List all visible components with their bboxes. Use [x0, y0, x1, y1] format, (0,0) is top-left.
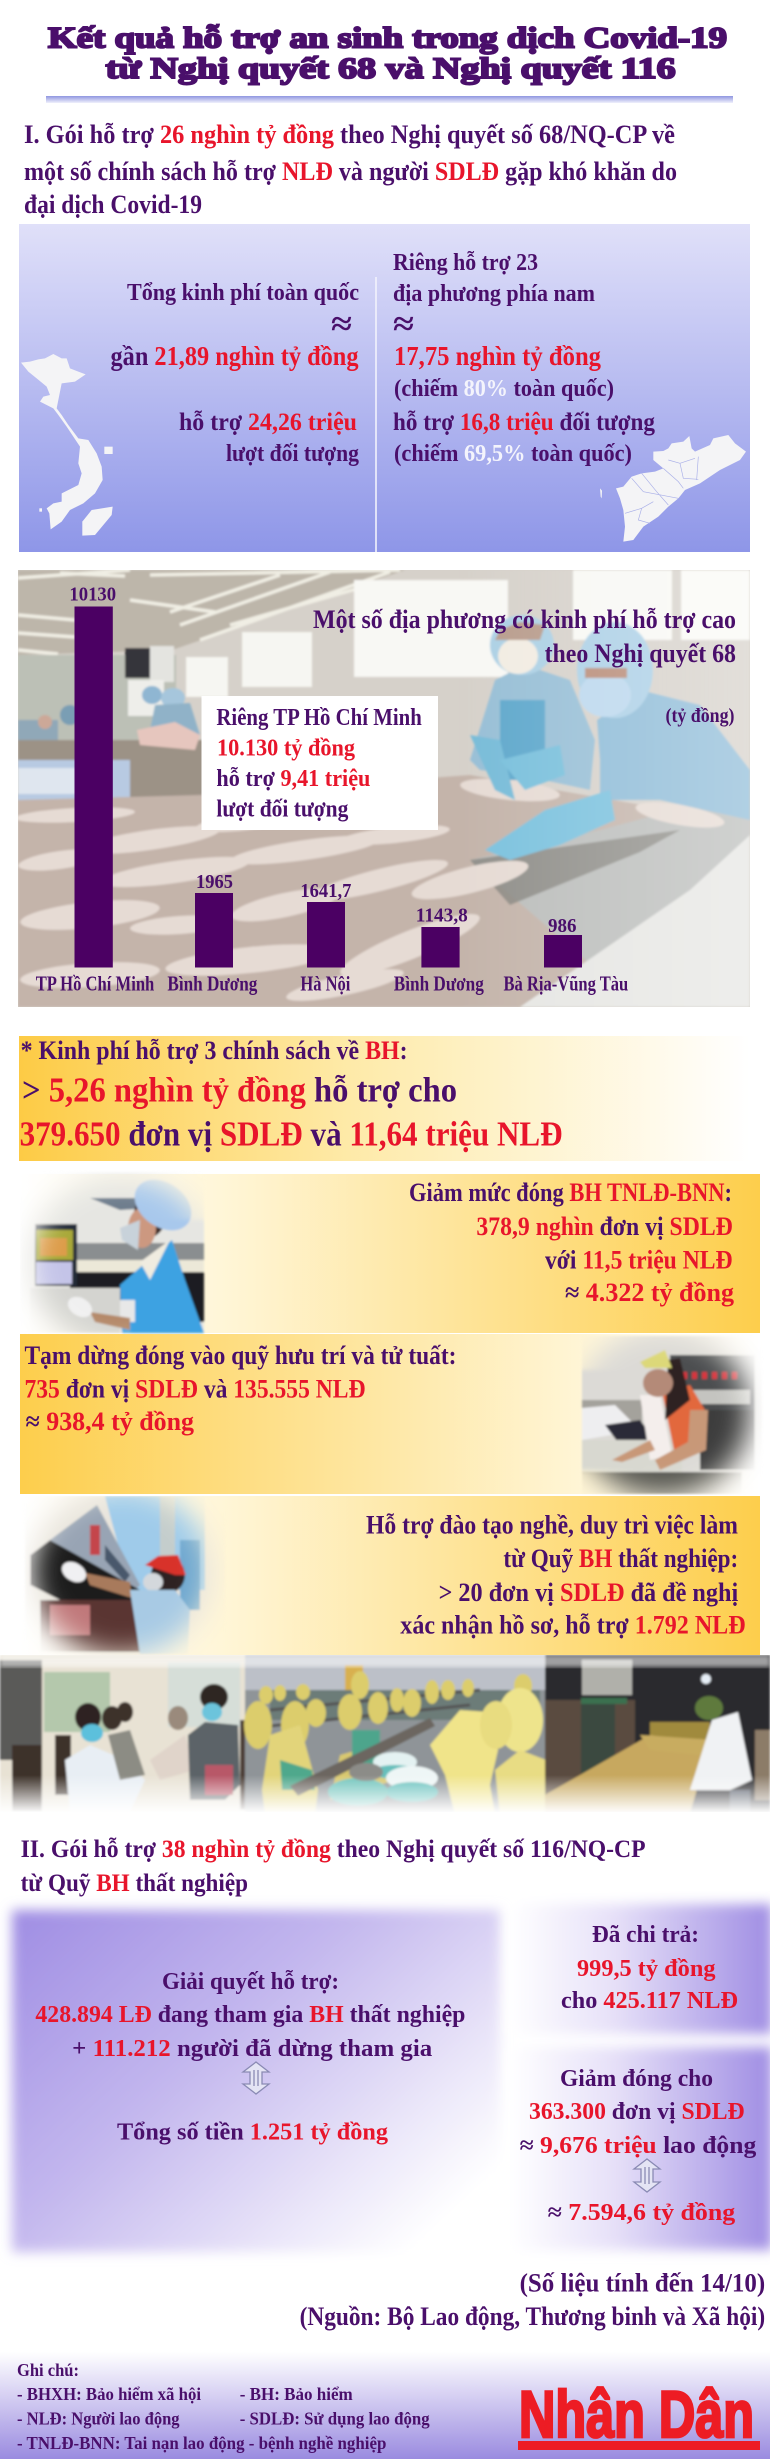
photo: fish processing workers [15, 570, 750, 1007]
panel: insurance policy funding summary: > 5,26 nghìn tỷ đồng hỗ trợ cho [22, 1070, 457, 1110]
title [48, 22, 727, 85]
fade edges [0, 1775, 770, 1813]
panel: insurance policy funding summary: * Kinh phí hỗ trợ 3 chính sách về BH: [21, 1036, 408, 1065]
bar: Bình Dương second: 1143,8 [416, 905, 468, 927]
right column: 23 southern localities: địa phương phía nam [393, 281, 595, 307]
left column: national total: hỗ trợ 24,26 triệu [179, 409, 357, 436]
callout: Ho Chi Minh City: hỗ trợ 9,41 triệu [216, 766, 370, 792]
panel: already paid [510, 1904, 770, 2034]
photo: garment worker [582, 1336, 762, 1494]
chart heading [313, 605, 736, 727]
source note: (Số liệu tính đến 14/10) [520, 2268, 765, 2298]
heading: section I: I. Gói hỗ trợ 26 nghìn tỷ đồng theo Nghị quyết số 68/NQ-CP về [24, 120, 675, 149]
callout: Ho Chi Minh City [202, 696, 438, 830]
panel: reduced contributions II [510, 2047, 770, 2250]
icon: map of Vietnam [21, 354, 113, 536]
worker right [597, 690, 750, 820]
right column: 23 southern localities: (chiếm 69,5% toàn quốc) [394, 441, 632, 467]
heading: section II: từ Quỹ BH thất nghiệp [21, 1870, 248, 1897]
left column: national total [110, 280, 359, 467]
heading: section I: đại dịch Covid-19 [24, 190, 202, 219]
legend notes: - NLĐ: Người lao động [17, 2409, 180, 2429]
callout: Ho Chi Minh City: lượt đối tượng [216, 797, 348, 823]
title underline [46, 96, 733, 103]
heading: section I: một số chính sách hỗ trợ NLĐ và người SDLĐ gặp khó khăn do [24, 157, 677, 186]
left column: national total: lượt đối tượng [226, 441, 359, 467]
text: paused contributions [24, 1341, 456, 1436]
legend notes: Ghi chú: [17, 2360, 79, 2380]
text: reduced contributions: 378,9 nghìn đơn vị SDLĐ [476, 1212, 733, 1241]
icon: double arrow [243, 2062, 269, 2094]
legend notes: - BHXH: Bảo hiểm xã hội [17, 2384, 201, 2404]
panel: already paid: cho 425.117 NLĐ [561, 1988, 738, 2014]
callout: Ho Chi Minh City: Riêng TP Hồ Chí Minh [216, 705, 422, 731]
text: vocational training [366, 1511, 746, 1640]
bar: Hà Nội: Hà Nội [300, 972, 351, 996]
bar: Bình Dương: Bình Dương [167, 972, 258, 996]
text: reduced contributions: ≈ 4.322 tỷ đồng [565, 1278, 734, 1307]
right column: 23 southern localities [393, 250, 655, 467]
bar chart [36, 584, 628, 996]
heading: section I [24, 120, 677, 219]
panel: support resolved: Giải quyết hỗ trợ: [162, 1969, 339, 1995]
panel: reduced contributions II: ≈ 9,676 triệu lao động [520, 2133, 756, 2159]
bar: TP Hồ Chí Minh [36, 584, 155, 996]
source note [300, 2268, 765, 2331]
panel: already paid: Đã chi trả: [592, 1922, 699, 1948]
title: từ Nghị quyết 68 và Nghị quyết 116 [106, 52, 676, 85]
right column: 23 southern localities: 17,75 nghìn tỷ đồng [394, 341, 601, 371]
panel: reduced contributions II: Giảm đóng cho [560, 2066, 713, 2092]
legend notes [17, 2360, 430, 2453]
panel: bar chart over factory photo [15, 570, 750, 1007]
callout: Ho Chi Minh City: 10.130 tỷ đồng [217, 736, 355, 762]
panel: reduced occupational insurance contributions [20, 1169, 760, 1333]
bar: Bà Rịa-Vũng Tàu: Bà Rịa-Vũng Tàu [504, 972, 628, 996]
bar: Bình Dương: 1965 [196, 871, 233, 893]
panel: already paid: 999,5 tỷ đồng [577, 1956, 716, 1982]
title: Kết quả hỗ trợ an sinh trong dịch Covid-19 [48, 22, 727, 54]
panel: vocational training support [20, 1496, 760, 1656]
worker left [470, 665, 595, 790]
bar: Bình Dương second: Bình Dương [394, 972, 484, 996]
legend notes: - TNLĐ-BNN: Tai nạn lao động - bệnh nghề nghiệp [17, 2433, 386, 2453]
photo: worker at monitor [20, 1169, 204, 1333]
text: vocational training: > 20 đơn vị SDLĐ đã đề nghị [439, 1578, 738, 1607]
text: paused contributions: Tạm dừng đóng vào quỹ hưu trí và tử tuất: [24, 1341, 456, 1370]
text: vocational training: Hỗ trợ đào tạo nghề, duy trì việc làm [366, 1511, 738, 1540]
photo strip: workers [0, 1655, 770, 1822]
panel: national and southern funding [19, 224, 750, 552]
bar: TP Hồ Chí Minh: TP Hồ Chí Minh [36, 972, 155, 996]
left column: national total: gần 21,89 nghìn tỷ đồng [110, 341, 359, 371]
heading: section II [21, 1836, 646, 1897]
right column: 23 southern localities: hỗ trợ 16,8 triệu đối tượng [393, 409, 655, 436]
heading: section II: II. Gói hỗ trợ 38 nghìn tỷ đồng theo Nghị quyết số 116/NQ-CP [21, 1836, 646, 1863]
icon: double arrow [634, 2159, 660, 2192]
bar: TP Hồ Chí Minh: 10130 [69, 584, 116, 606]
panel: support resolved: Tổng số tiền 1.251 tỷ đồng [117, 2120, 388, 2146]
panel: reduced contributions II: ≈ 7.594,6 tỷ đồng [548, 2200, 735, 2226]
text: paused contributions: ≈ 938,4 tỷ đồng [26, 1407, 194, 1436]
chart heading: (tỷ đồng) [666, 705, 734, 727]
bar: Bình Dương second [394, 905, 484, 996]
bar: Bình Dương [167, 871, 258, 996]
legend notes: - SDLĐ: Sử dụng lao động [240, 2409, 430, 2429]
panel: insurance policy funding summary [19, 1036, 750, 1161]
text: reduced contributions [409, 1178, 734, 1307]
bar: Hà Nội: 1641,7 [300, 880, 351, 902]
chart heading: Một số địa phương có kinh phí hỗ trợ cao [313, 605, 736, 634]
panel: paused pension contributions [20, 1334, 762, 1494]
left column: national total: ≈ [331, 306, 352, 343]
icon: map of southern provinces [600, 435, 746, 542]
seafood line scene [243, 1688, 546, 1810]
office scene [0, 1655, 245, 1820]
panel: reduced contributions II: 363.300 đơn vị SDLĐ [529, 2099, 745, 2125]
text: reduced contributions: với 11,5 triệu NLĐ [545, 1246, 733, 1274]
footer background [0, 2352, 770, 2459]
right column: 23 southern localities: ≈ [393, 306, 414, 343]
text: vocational training: từ Quỹ BH thất nghiệp: [503, 1544, 738, 1573]
panel: support resolved: + 111.212 người đã dừng tham gia [72, 2036, 432, 2062]
panel: insurance policy funding summary: 379.650 đơn vị SDLĐ và 11,64 triệu NLĐ [20, 1114, 563, 1154]
bar: Hà Nội [300, 880, 351, 996]
bar: Bà Rịa-Vũng Tàu: 986 [548, 915, 576, 937]
right column: 23 southern localities: (chiếm 80% toàn quốc) [394, 376, 614, 402]
panel: support resolved [12, 1910, 500, 2252]
bar: Bà Rịa-Vũng Tàu [504, 915, 628, 996]
text: paused contributions: 735 đơn vị SDLĐ và 135.555 NLĐ [24, 1375, 366, 1404]
legend notes: - BH: Bảo hiểm [240, 2384, 353, 2404]
photo: port worker [25, 1496, 225, 1656]
text: reduced contributions: Giảm mức đóng BH TNLĐ-BNN: [409, 1178, 732, 1207]
panel: support resolved: 428.894 LĐ đang tham gia BH thất nghiệp [35, 2002, 465, 2028]
left column: national total: Tổng kinh phí toàn quốc [127, 280, 359, 306]
timber factory scene [545, 1655, 770, 1820]
chart heading: theo Nghị quyết 68 [545, 639, 736, 668]
right column: 23 southern localities: Riêng hỗ trợ 23 [393, 250, 538, 276]
text: vocational training: xác nhận hồ sơ, hỗ trợ 1.792 NLĐ [400, 1610, 746, 1640]
